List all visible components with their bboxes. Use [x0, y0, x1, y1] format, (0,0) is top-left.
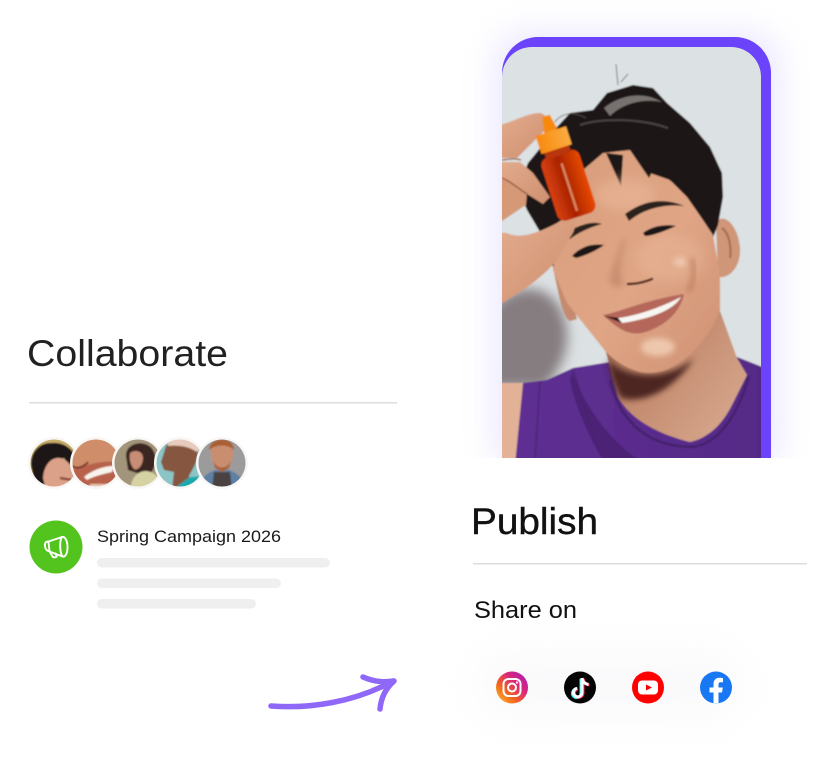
bottle shine: [560, 163, 578, 211]
nostril: [628, 279, 652, 284]
avatar group: [28, 437, 248, 490]
ear left: [554, 272, 578, 322]
placeholder line 1: [97, 558, 330, 568]
bottle body: [539, 148, 598, 223]
placeholder line 3: [97, 599, 256, 608]
panel: phone with portrait: [490, 30, 782, 475]
arrow: [271, 677, 394, 709]
phone frame: [502, 37, 771, 458]
mouth shadow: [604, 316, 622, 323]
lips: [603, 294, 684, 334]
heading: Collaborate: Collaborate: [27, 333, 228, 374]
hair mass: [523, 85, 723, 240]
campaign card: [30, 520, 330, 608]
avatar 5: [196, 437, 248, 490]
avatar 2: [70, 437, 117, 489]
serum bottle: [527, 110, 598, 223]
purple shirt: [515, 357, 765, 465]
avatar 3: [112, 437, 158, 489]
palm and thumb: [495, 216, 575, 303]
face: [553, 150, 720, 373]
hair highlight: [604, 95, 662, 116]
avatar 4: [154, 437, 200, 489]
fringe strands: [606, 150, 672, 186]
icon: tiktok: [564, 672, 596, 704]
bottle cap: [536, 126, 572, 154]
stray hairs: [555, 64, 628, 122]
eyebrows: [625, 201, 684, 221]
eyes: [643, 225, 676, 236]
collar: [610, 376, 749, 447]
icon: facebook: [700, 672, 732, 704]
heading: Publish: Publish: [471, 501, 598, 542]
finger 2: [495, 162, 550, 204]
social icons: [496, 672, 732, 704]
forehead glow: [595, 179, 655, 211]
chin shadow: [608, 358, 694, 400]
finger gaps: [502, 159, 527, 194]
phone glow: [492, 30, 782, 475]
divider: collaborate: [29, 402, 397, 404]
placeholder line 2: [97, 578, 281, 588]
panel: publish: [471, 501, 807, 715]
icon: youtube: [632, 672, 664, 704]
smile fold: [688, 258, 694, 292]
bottle neck: [544, 144, 571, 160]
avatar 1: [28, 437, 74, 489]
social glow: [480, 655, 740, 715]
icon: instagram: [496, 672, 528, 704]
campaign title: Spring Campaign 2026: [97, 527, 281, 546]
portrait photo: [502, 47, 761, 458]
nose side shadow: [609, 243, 624, 288]
label: share on: Share on: [474, 597, 577, 624]
teeth: [618, 297, 681, 323]
finger 1: [502, 112, 546, 159]
cheek glow: [644, 240, 700, 278]
shoulder: [502, 382, 524, 458]
wall shadow: [490, 289, 567, 388]
side hair: [552, 263, 555, 268]
photo backdrop: [502, 47, 761, 384]
ear right: [716, 219, 740, 277]
finger 3: [502, 180, 528, 222]
neck: [604, 300, 747, 442]
panel: collaborate: [27, 333, 397, 608]
divider: publish: [473, 563, 807, 564]
icon: megaphone: [30, 520, 82, 574]
